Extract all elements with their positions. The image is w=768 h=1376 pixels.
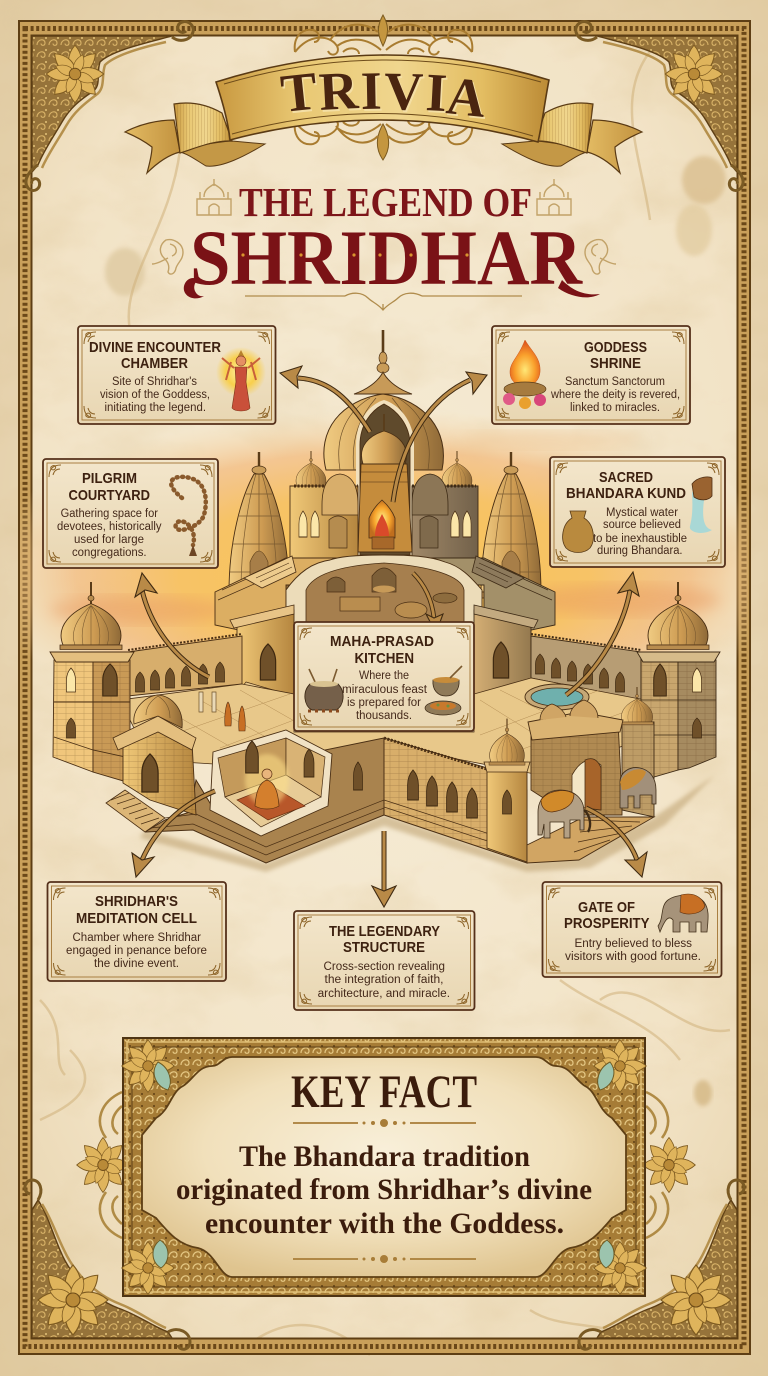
- icon: clay jar: [563, 511, 593, 552]
- corner flower: top right: [594, 1040, 646, 1092]
- title: TRIVIA: TRIVIA: [278, 60, 489, 129]
- right corner tower: [637, 582, 720, 777]
- card: maha-prasad kitchen: Where the: [359, 670, 409, 682]
- arrow: to meditation cell: [132, 791, 215, 877]
- right shrine block: [412, 474, 478, 560]
- inner sanctum with glowing deity: [358, 414, 412, 552]
- card: goddess shrine: SHRINE: [590, 355, 641, 372]
- card: shridhar's meditation cell: Chamber where Shridhar: [72, 932, 201, 944]
- card: divine encounter chamber: [78, 326, 276, 424]
- trivia ribbon banner: [125, 15, 642, 173]
- divider bottom: [293, 1255, 476, 1263]
- left shrine block: [290, 474, 358, 560]
- card: divine encounter chamber: DIVINE ENCOUNTER: [89, 339, 221, 356]
- icon: prayer beads: [171, 477, 206, 556]
- main ribbon band: [216, 55, 549, 142]
- title block: the legend of shridhar: [152, 179, 616, 310]
- rear shikhara left: [223, 452, 295, 598]
- card: sacred bhandara kund: to be inexhaustible: [593, 533, 687, 545]
- card: the legendary structure: architecture, and miracle.: [318, 988, 450, 1000]
- card: goddess shrine: GODDESS: [584, 339, 647, 356]
- temple illustration: cross-section: [20, 330, 748, 872]
- icon: decorated elephant: [658, 894, 708, 932]
- upper terrace right: [410, 556, 555, 640]
- card: shridhar's meditation cell: engaged in penance before: [66, 945, 207, 957]
- left corner tower: [50, 582, 134, 783]
- card: goddess shrine: Sanctum Sanctorum: [565, 376, 665, 388]
- pilgrim figures: [199, 692, 245, 731]
- heading: shridhar: SHRIDHAR: [190, 214, 584, 301]
- divider top: [293, 1119, 476, 1127]
- card: divine encounter chamber: vision of the Goddess,: [100, 389, 210, 401]
- ground shadow hatching: [140, 775, 715, 872]
- card: divine encounter chamber: CHAMBER: [121, 355, 188, 372]
- corner ornament: top left: [26, 22, 193, 190]
- back wall left with arcade: [128, 634, 242, 696]
- card: shridhar's meditation cell: [48, 882, 226, 981]
- key fact statement: encounter with the Goddess.: [205, 1207, 564, 1240]
- corner flower: bottom right: [594, 1240, 646, 1294]
- card: goddess shrine: [492, 326, 690, 424]
- key fact statement: [176, 1140, 592, 1240]
- arrow: to goddess shrine: [393, 372, 487, 502]
- card: the legendary structure: the integration of faith,: [324, 974, 444, 986]
- card: gate of prosperity: visitors with good fortune.: [565, 951, 701, 963]
- card: pilgrim courtyard: [43, 459, 218, 568]
- corner flower: bottom left: [122, 1240, 174, 1294]
- card: pilgrim courtyard: PILGRIM: [82, 470, 137, 487]
- card: gate of prosperity: GATE OF: [578, 899, 635, 916]
- icon: elephant right: [585, 240, 616, 274]
- card: gate of prosperity: [542, 882, 722, 977]
- central left pavilion: [230, 605, 294, 702]
- key fact statement: originated from Shridhar’s divine: [176, 1173, 592, 1206]
- left ribbon tail: [125, 103, 265, 173]
- arrow: to pilgrim courtyard: [135, 573, 209, 677]
- corner ornament: bottom left: [25, 1180, 190, 1349]
- left gatehouse stairs: [106, 790, 165, 832]
- corner flower: top left: [122, 1040, 174, 1092]
- sacred kund pool: [525, 684, 589, 710]
- card: pilgrim courtyard: congregations.: [72, 547, 147, 559]
- left gatehouse: [113, 695, 196, 815]
- icon: plate of food: [425, 701, 461, 715]
- card: pilgrim courtyard: devotees, historically: [57, 521, 162, 533]
- icon: temple left: [197, 179, 231, 215]
- card: maha-prasad kitchen: miraculous feast: [342, 684, 428, 696]
- corner ornament: top right: [576, 22, 743, 190]
- meditation cell cutaway: [210, 730, 332, 836]
- arrow: to divine encounter chamber: [280, 366, 370, 432]
- key fact statement: The Bhandara tradition: [239, 1140, 530, 1173]
- card: sacred bhandara kund: SACRED: [599, 469, 653, 486]
- rear gate tower with dome: [621, 687, 654, 817]
- icon: sacred fire and flowers: [503, 340, 546, 409]
- card: maha-prasad kitchen: is prepared for: [347, 697, 421, 709]
- card: goddess shrine: linked to miracles.: [570, 402, 660, 414]
- icon: temple right: [537, 179, 571, 215]
- ribbon ornament below: [295, 119, 472, 160]
- card: sacred bhandara kund: [550, 457, 725, 567]
- front small tower with dome: [484, 719, 530, 862]
- icon: pouring pot and water: [690, 477, 712, 533]
- arrow: to sacred bhandara kund: [566, 572, 639, 695]
- sunset sky glow: [20, 410, 748, 760]
- title: TRIVIA: TRIVIA: [279, 62, 490, 131]
- card: sacred bhandara kund: BHANDARA KUND: [566, 485, 686, 502]
- card: sacred bhandara kund: during Bhandara.: [597, 545, 682, 557]
- card: goddess shrine: where the deity is revered,: [550, 389, 680, 401]
- arrow: to gate of prosperity: [586, 808, 647, 877]
- card: sacred bhandara kund: Mystical water: [606, 507, 678, 519]
- card: pilgrim courtyard: Gathering space for: [61, 508, 158, 520]
- side lotus left: [77, 1092, 129, 1238]
- card: divine encounter chamber: Site of Shridhar's: [112, 376, 197, 388]
- card: pilgrim courtyard: used for large: [74, 534, 144, 546]
- gate of prosperity: [528, 700, 623, 815]
- heading: key fact: KEY FACT: [291, 1066, 477, 1118]
- icon: cauldron: [305, 669, 343, 711]
- icon: goddess with halo: [216, 347, 266, 411]
- card: shridhar's meditation cell: MEDITATION CELL: [76, 910, 197, 927]
- card: maha-prasad kitchen: [294, 622, 474, 731]
- main dome cutaway: [324, 330, 443, 555]
- card: pilgrim courtyard: COURTYARD: [68, 487, 150, 504]
- side lotus right: [643, 1092, 695, 1238]
- card: shridhar's meditation cell: the divine event.: [94, 958, 179, 970]
- upper terrace left: [215, 556, 360, 640]
- key fact parchment: [142, 1057, 626, 1277]
- right ribbon tail: [502, 103, 642, 173]
- front wall left face: [145, 738, 384, 863]
- heading: the legend of: THE LEGEND OF: [239, 179, 532, 225]
- front wall right face: [384, 738, 527, 863]
- rear shikhara right: [475, 452, 547, 598]
- card: gate of prosperity: Entry believed to bless: [574, 938, 692, 950]
- card: maha-prasad kitchen: MAHA-PRASAD: [330, 633, 434, 650]
- card: the legendary structure: Cross-section revealing: [324, 961, 445, 973]
- icon: serving bowl: [433, 666, 462, 696]
- card: divine encounter chamber: initiating the legend.: [104, 402, 206, 414]
- kitchen chamber cutaway: [286, 555, 482, 626]
- key fact panel: [77, 1038, 695, 1296]
- card: shridhar's meditation cell: SHRIDHAR'S: [95, 893, 178, 910]
- corner ornament: bottom right: [579, 1180, 744, 1349]
- card: gate of prosperity: PROSPERITY: [564, 915, 650, 932]
- title divider ornament: [245, 293, 522, 310]
- card: maha-prasad kitchen: KITCHEN: [354, 650, 414, 667]
- side dome left: [296, 451, 326, 488]
- card: sacred bhandara kund: source believed: [603, 519, 681, 531]
- gate elephant front: [538, 790, 590, 838]
- courtyard floor: [120, 678, 645, 775]
- card: maha-prasad kitchen: thousands.: [356, 710, 412, 722]
- gate elephant rear: [620, 768, 656, 808]
- side dome right: [442, 451, 472, 488]
- card: the legendary structure: THE LEGENDARY: [329, 923, 440, 940]
- central right pavilion: [474, 605, 538, 694]
- card: the legendary structure: [294, 911, 474, 1010]
- ribbon ornament above: [295, 15, 472, 55]
- key fact frame: [123, 1038, 645, 1296]
- arrow: to maha-prasad kitchen: [413, 573, 443, 633]
- arrow: to the legendary structure: [372, 831, 396, 907]
- base plinth and right stairs: [527, 817, 654, 863]
- back wall right with arcade: [531, 634, 641, 700]
- icon: elephant left: [152, 240, 183, 274]
- card: the legendary structure: STRUCTURE: [343, 939, 425, 956]
